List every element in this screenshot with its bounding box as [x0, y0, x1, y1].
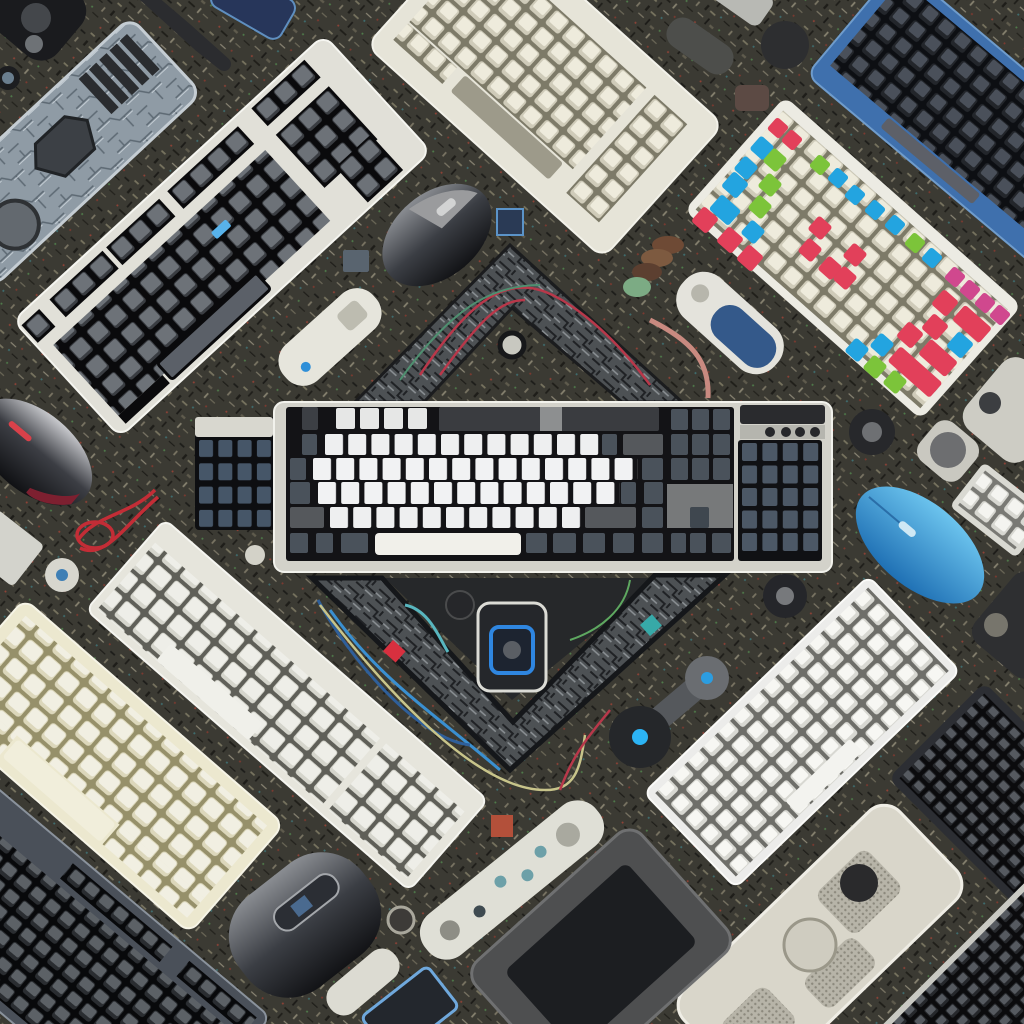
gray chip near top-left keyboard	[343, 250, 369, 272]
keyboard: bottom-left white long	[86, 519, 488, 891]
dark modifier keys	[290, 409, 731, 553]
keyboard: colorful keys	[684, 96, 1022, 420]
wire: pink near center	[650, 320, 708, 398]
blue framed device bottom	[361, 966, 459, 1024]
right numeric pad keys	[742, 443, 823, 555]
red cable	[77, 490, 158, 550]
remote: small bottom	[320, 942, 406, 1022]
space bar	[375, 533, 521, 555]
device: dark tablet	[464, 823, 738, 1024]
device: right edge dark gadget	[965, 565, 1024, 685]
device: top pills and stylus	[145, 0, 776, 111]
keyboard: bottom-left black	[0, 728, 270, 1024]
upper chevron circuit panel	[355, 245, 682, 402]
keyboard: bottom right corner dark	[866, 871, 1024, 1024]
beads stack	[623, 236, 684, 297]
small blue square chip	[497, 209, 523, 235]
white alpha keys	[313, 434, 638, 529]
remote: white with blue capsule	[666, 261, 794, 385]
device: gray circuit panel	[0, 17, 201, 287]
keyboard: left cream	[0, 599, 284, 933]
device: right edge gamepad	[955, 350, 1024, 470]
small keyboard: left edge	[0, 509, 45, 587]
mouse: bottom black	[208, 831, 402, 1019]
device: joystick with blue lights	[609, 656, 729, 768]
function row	[302, 407, 659, 431]
media knobs	[740, 425, 825, 439]
keyboard: central hero	[274, 402, 832, 572]
heat sink vents	[79, 34, 160, 114]
device: top-left dark gamepad	[0, 0, 95, 87]
device: white game controller panel	[669, 796, 971, 1024]
keyboard: top center cream	[367, 0, 723, 258]
accent chip	[491, 815, 513, 837]
speaker grill	[740, 405, 825, 424]
keyboard: top-left black with white frame	[13, 35, 431, 437]
keyboard: right dark	[888, 682, 1024, 934]
lower chevron circuit panel	[312, 575, 725, 790]
small keyboard: right edge	[950, 462, 1024, 558]
remote: bottom white	[410, 791, 614, 969]
mouse: left black and red	[0, 378, 112, 526]
circuit inset	[667, 484, 733, 528]
remote: white small	[269, 279, 391, 395]
keyboard: bottom right white	[644, 576, 960, 888]
device: blue square dial	[478, 603, 546, 691]
mouse: blue	[835, 464, 1005, 626]
keyboard: left numeric pad	[195, 417, 275, 530]
mouse: black center top	[363, 163, 511, 307]
keyboard: top right blue	[807, 0, 1024, 268]
dark circuit region inside lower chevron	[385, 578, 660, 700]
